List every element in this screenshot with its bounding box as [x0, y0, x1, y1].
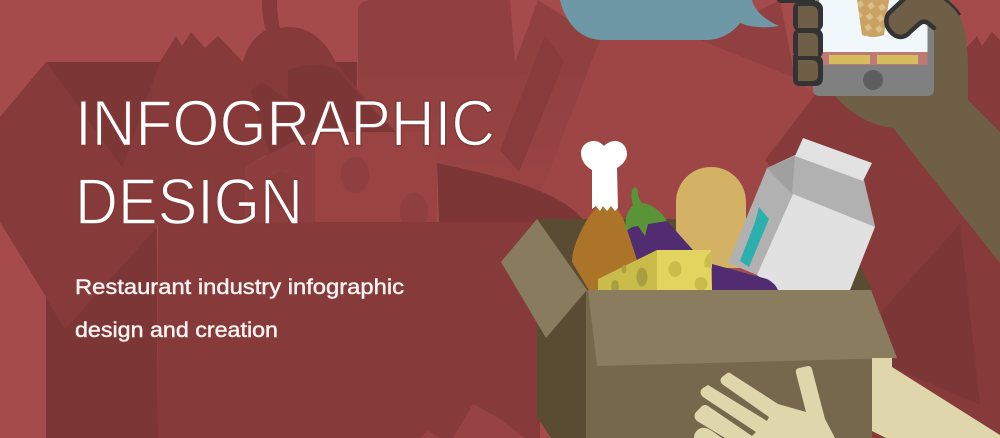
little finger: [694, 428, 722, 438]
hand holding phone: [776, 0, 1000, 263]
box back: [537, 219, 872, 438]
front panel: [586, 290, 872, 438]
milk carton: [728, 138, 875, 290]
forearm: [872, 358, 1000, 438]
thumb: [886, 0, 960, 60]
chicken drumstick: [572, 141, 640, 292]
cardboard box: [501, 219, 897, 438]
title: [75, 86, 495, 238]
speech bubble: [560, 0, 779, 40]
title: INFOGRAPHIC: [75, 86, 495, 160]
cheese: [598, 250, 712, 292]
phone: [813, 0, 934, 96]
bread: [676, 167, 746, 268]
palm and thumb: [694, 366, 835, 438]
hand holding box: [694, 358, 1000, 438]
eggplant: [625, 188, 778, 290]
subtitle: [75, 276, 404, 342]
arm: [830, 0, 1000, 263]
ice cream cone: [857, 0, 889, 37]
front flap: [588, 290, 897, 366]
subtitle: design and creation: [75, 319, 278, 342]
title: DESIGN: [75, 165, 303, 238]
left flap: [501, 219, 587, 338]
subtitle: Restaurant industry infographic: [75, 276, 404, 299]
fingers: [776, 0, 823, 86]
